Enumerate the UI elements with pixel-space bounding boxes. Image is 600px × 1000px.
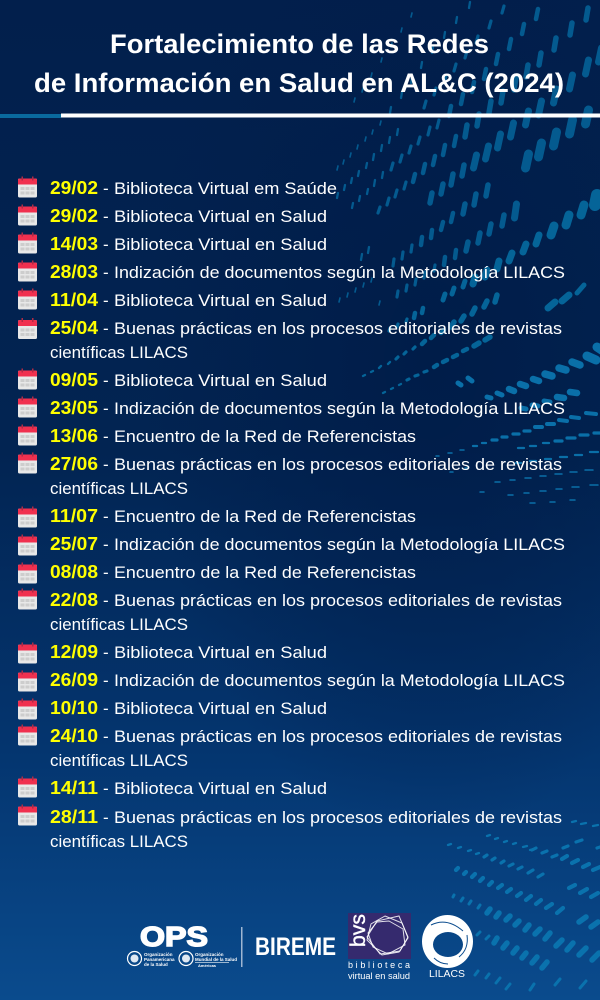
logo: OPS	[128, 921, 237, 968]
event 24/10: 24/10	[50, 726, 98, 746]
logo: OPS: OPS	[140, 921, 208, 952]
event 14/11	[18, 776, 327, 798]
logo: OPS: Américas	[198, 963, 217, 968]
event 08/08: Encuentro de la Red de Referencistas	[114, 563, 416, 582]
logo: LILACS	[422, 915, 473, 980]
logo: OPS: de la Salud	[144, 962, 168, 967]
event 13/06: -	[103, 427, 109, 446]
event 28/03: Indización de documentos según la Metodología LILACS	[114, 263, 565, 282]
event 25/04: -	[103, 319, 109, 338]
event 09/05: Biblioteca Virtual en Salud	[114, 371, 327, 390]
event 24/10	[18, 724, 562, 770]
event 11/04: -	[103, 291, 109, 310]
event 10/10: 10/10	[50, 698, 98, 718]
event 10/10: Biblioteca Virtual en Salud	[114, 699, 327, 718]
event 14/03: Biblioteca Virtual en Salud	[114, 235, 327, 254]
event 28/03: -	[103, 263, 109, 282]
event 08/08	[18, 562, 416, 584]
event 09/05: -	[103, 371, 109, 390]
event 11/04	[18, 288, 327, 310]
event 12/09: 12/09	[50, 642, 98, 662]
event 13/06	[18, 424, 416, 446]
event 25/07: 25/07	[50, 534, 98, 554]
event 28/11: 28/11	[50, 807, 98, 827]
event 29/02: -	[103, 179, 109, 198]
event 29/02 second: -	[103, 207, 109, 226]
event 14/03: 14/03	[50, 234, 98, 254]
event list	[18, 176, 565, 851]
logo: BVS	[347, 913, 411, 981]
event 26/09: -	[103, 671, 109, 690]
event 24/10: -	[103, 727, 109, 746]
event 28/11	[18, 804, 562, 851]
event 28/03: 28/03	[50, 262, 98, 282]
event 22/08: 22/08	[50, 590, 98, 610]
event 28/11: -	[103, 808, 109, 827]
event 27/06: Buenas prácticas en los procesos editoriales de revistas	[114, 455, 562, 474]
event 23/05: -	[103, 399, 109, 418]
event 11/07: -	[103, 507, 109, 526]
logo divider	[241, 927, 242, 967]
title	[34, 29, 564, 98]
event 27/06: 27/06	[50, 454, 98, 474]
event 10/10: -	[103, 699, 109, 718]
event 11/04: Biblioteca Virtual en Salud	[114, 291, 327, 310]
event 26/09: 26/09	[50, 670, 98, 690]
event 25/04: científicas LILACS	[50, 343, 188, 362]
event 29/02 second: 29/02	[50, 206, 98, 226]
event 11/04: 11/04	[50, 290, 98, 310]
event 23/05: Indización de documentos según la Metodología LILACS	[114, 399, 565, 418]
event 09/05: 09/05	[50, 370, 98, 390]
event 13/06: Encuentro de la Red de Referencistas	[114, 427, 416, 446]
event 23/05	[18, 396, 565, 418]
event 25/07: Indización de documentos según la Metodología LILACS	[114, 535, 565, 554]
header rule	[0, 114, 600, 118]
logo: OPS: Organización	[195, 952, 224, 957]
event 22/08: -	[103, 591, 109, 610]
event 28/11: Buenas prácticas en los procesos editoriales de revistas	[114, 808, 562, 827]
dotted wave pattern	[337, 2, 600, 990]
logo: OPS: Mundial de la Salud	[195, 957, 237, 962]
event 27/06: -	[103, 455, 109, 474]
event 29/02: 29/02	[50, 178, 98, 198]
event 27/06: científicas LILACS	[50, 479, 188, 498]
event 12/09: -	[103, 643, 109, 662]
event 22/08: científicas LILACS	[50, 615, 188, 634]
event 14/11: -	[103, 779, 109, 798]
event 29/02: Biblioteca Virtual em Saúde	[114, 179, 337, 198]
event 10/10	[18, 698, 327, 720]
title: Fortalecimiento de las Redes	[110, 29, 489, 59]
event 25/07	[18, 534, 565, 556]
logo: OPS: Panamericana	[144, 957, 175, 962]
event 14/03	[18, 232, 327, 254]
event 25/04: Buenas prácticas en los procesos editoriales de revistas	[114, 319, 562, 338]
event 28/03	[18, 260, 565, 282]
event 11/07: Encuentro de la Red de Referencistas	[114, 507, 416, 526]
title: de Información en Salud en AL&C (2024)	[34, 68, 564, 98]
logo: BVS: bvs	[347, 914, 370, 947]
event 13/06: 13/06	[50, 426, 98, 446]
event 24/10: Buenas prácticas en los procesos editoriales de revistas	[114, 727, 562, 746]
event 23/05: 23/05	[50, 398, 98, 418]
event 14/11: 14/11	[50, 778, 98, 798]
event 08/08: -	[103, 563, 109, 582]
event 11/07: 11/07	[50, 506, 98, 526]
event 25/07: -	[103, 535, 109, 554]
event 25/04	[18, 318, 562, 362]
event 26/09: Indización de documentos según la Metodología LILACS	[114, 671, 565, 690]
event 08/08: 08/08	[50, 562, 98, 582]
event 22/08: Buenas prácticas en los procesos editoriales de revistas	[114, 591, 562, 610]
logo: BVS: virtual en salud	[348, 971, 410, 981]
event 25/04: 25/04	[50, 318, 98, 338]
event 29/02 second: Biblioteca Virtual en Salud	[114, 207, 327, 226]
event 14/11: Biblioteca Virtual en Salud	[114, 779, 327, 798]
event 11/07	[18, 506, 416, 528]
logo: BVS: biblioteca	[348, 960, 410, 970]
event 24/10: científicas LILACS	[50, 751, 188, 770]
event 28/11: científicas LILACS	[50, 832, 188, 851]
event 29/02	[18, 176, 337, 198]
logo: LILACS: LILACS	[429, 969, 465, 980]
logo: BIREME: BIREME	[255, 933, 336, 961]
event 26/09	[18, 670, 565, 692]
event 27/06	[18, 452, 562, 498]
logo: OPS: Organización	[144, 952, 173, 957]
event 12/09: Biblioteca Virtual en Salud	[114, 643, 327, 662]
event 09/05	[18, 368, 327, 390]
event 22/08	[18, 588, 562, 634]
event 29/02 second	[18, 204, 327, 226]
event 14/03: -	[103, 235, 109, 254]
event 12/09	[18, 642, 327, 664]
